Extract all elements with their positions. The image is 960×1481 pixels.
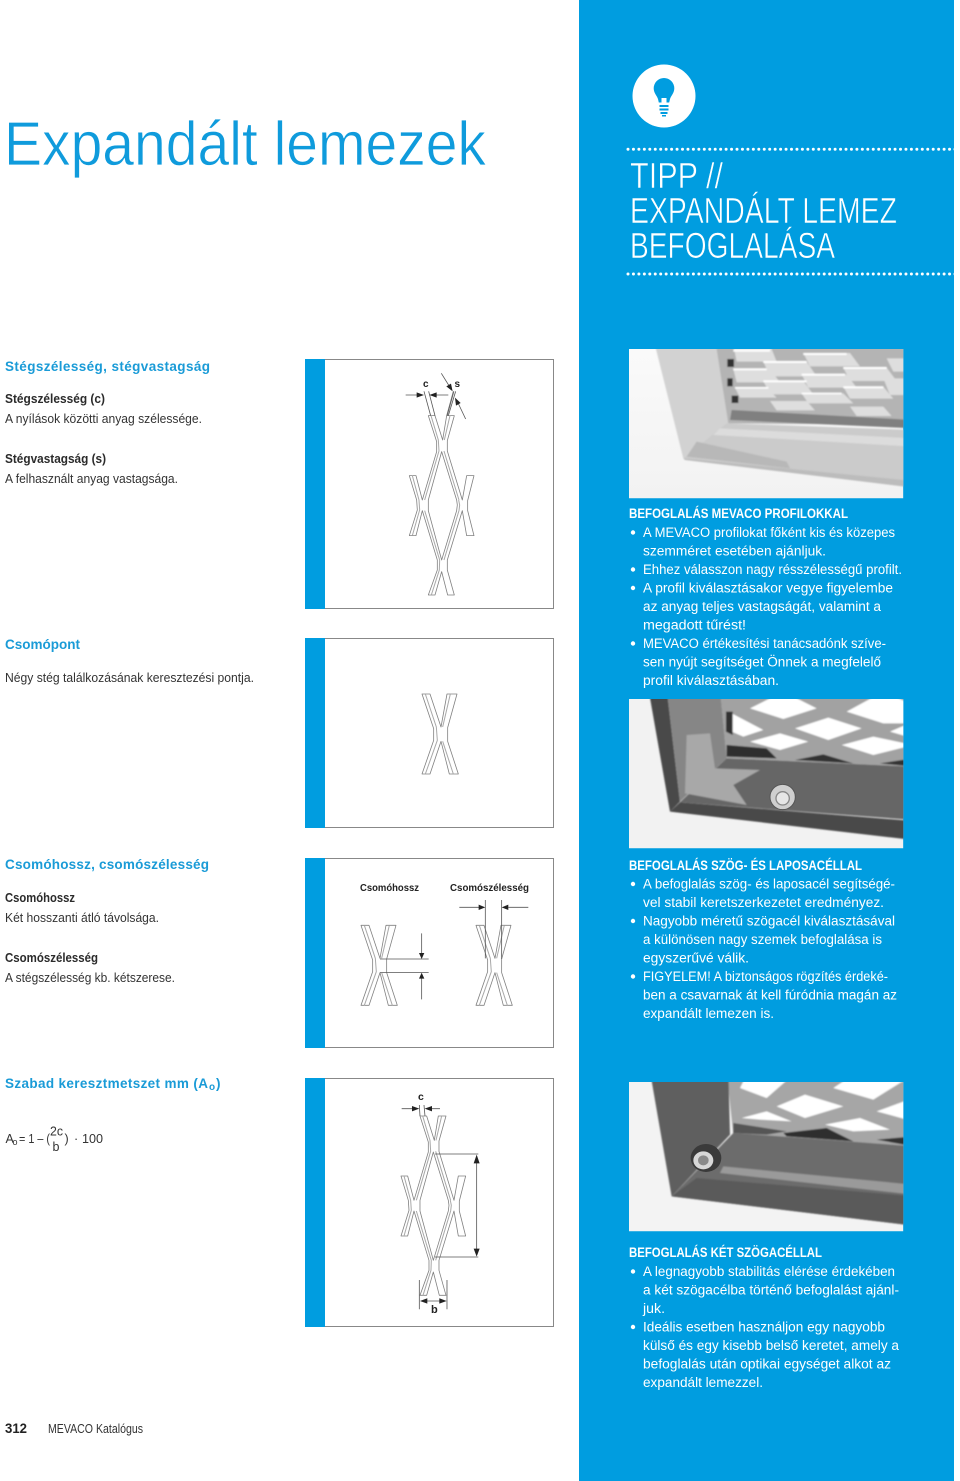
text block: mounting with two angle steels: befoglalás után optikai egységet alkot az: [643, 1356, 891, 1372]
panel: strand diagram: [305, 359, 554, 609]
chart: expanded mesh with c and s: [406, 373, 474, 595]
text block: strand width and thickness: [5, 359, 210, 486]
text block: mounting with mevaco profiles: A MEVACO profilokat főként kis és közepes: [643, 525, 895, 540]
text block: mounting with angle and flat steel: egyszerűvé válik.: [643, 950, 749, 966]
label s: s: [454, 379, 460, 390]
label c: c: [418, 1091, 424, 1103]
text block: free cross-section heading: o: [209, 1082, 215, 1093]
text block: mounting with angle and flat steel: Nagyobb méretű szögacél kiválasztásával: [643, 914, 895, 928]
label b: b: [431, 1304, 438, 1316]
text block: mounting with mevaco profiles: sen nyújt segítséget Önnek a megfelelő: [643, 654, 881, 670]
text block: mounting with two angle steels: külső és egy kisebb belső keretet, amely a: [643, 1338, 899, 1353]
text block: mounting with two angle steels: a két szögacélba történő befoglalást ajánl-: [643, 1282, 899, 1298]
text block: mounting with angle and flat steel: [629, 858, 897, 1021]
label c: c: [423, 379, 429, 390]
chart: node dimension drawings: [361, 900, 528, 1005]
text block: mounting with angle and flat steel: ben a csavarnak át kell fúródnia magán az: [643, 988, 897, 1002]
photo: angle and flat steel frame: [629, 688, 913, 848]
text block: node length and width: Csomóhossz: [5, 891, 75, 905]
text block: mounting with angle and flat steel: vel stabil keretszerkezetet eredményez.: [643, 895, 884, 910]
text block: node length and width: Csomószélesség: [5, 951, 98, 965]
text block: mounting with two angle steels: Ideális esetben használjon egy nagyobb: [643, 1320, 885, 1334]
formula: 100: [82, 1132, 103, 1146]
text block: mounting with angle and flat steel: A befoglalás szög- és laposacél segítségé-: [643, 876, 895, 892]
text block: strand width and thickness: Stégvastagság (s): [5, 452, 106, 466]
chart: mesh with b and c dimensions: [401, 1105, 480, 1309]
text block: mounting with mevaco profiles: az anyag teljes vastagságát, valamint a: [643, 599, 881, 614]
text block: mounting with angle and flat steel: FIGYELEM! A biztonságos rögzítés érdeké-: [643, 969, 888, 984]
formula: ·: [74, 1132, 78, 1146]
sidebar heading: TIPP //: [630, 155, 723, 196]
text block: node length and width: [5, 857, 209, 985]
text block: strand width and thickness: Stégszélesség, stégvastagság: [5, 359, 210, 374]
icon: mesh node: [422, 694, 458, 774]
text block: mounting with two angle steels: BEFOGLALÁS KÉT SZÖGACÉLLAL: [629, 1245, 822, 1260]
text block: node: Csomópont: [5, 637, 80, 652]
text block: strand width and thickness: A nyílások közötti anyag szélessége.: [5, 412, 202, 426]
sidebar heading: [630, 155, 897, 266]
panel: node diagram: [305, 638, 554, 828]
footer: page number and catalogue: [5, 1420, 143, 1436]
text block: mounting with two angle steels: A legnagyobb stabilitás elérése érdekében: [643, 1264, 895, 1279]
formula: A: [6, 1132, 14, 1146]
text block: node: [5, 637, 254, 685]
text block: mounting with mevaco profiles: A profil kiválasztásakor vegye figyelembe: [643, 580, 893, 596]
text block: mounting with mevaco profiles: megadott tűrést!: [643, 618, 746, 632]
icon: bolt: [770, 784, 795, 810]
text block: mounting with two angle steels: [629, 1245, 899, 1390]
formula: [6, 1124, 103, 1154]
text block: mounting with mevaco profiles: profil kiválasztásában.: [643, 673, 779, 688]
dotted rule bottom: [628, 272, 960, 276]
panel: free cross-section diagram: [305, 1078, 554, 1327]
text block: strand width and thickness: A felhasznált anyag vastagsága.: [5, 472, 178, 486]
photo: mevaco profile frame: [629, 338, 913, 498]
formula: b: [52, 1140, 60, 1154]
text block: node length and width: Csomóhossz, csomószélesség: [5, 857, 209, 872]
text block: mounting with mevaco profiles: szemméret esetében ajánljuk.: [643, 544, 826, 558]
label: node width: Csomószélesség: [450, 882, 529, 894]
text block: node length and width: Két hosszanti átló távolsága.: [5, 911, 159, 925]
label: node length: Csomóhossz: [360, 882, 419, 894]
sidebar heading: BEFOGLALÁSA: [630, 225, 835, 266]
text block: free cross-section heading: ): [216, 1076, 220, 1091]
text block: mounting with mevaco profiles: Ehhez válasszon nagy résszélességű profilt.: [643, 562, 902, 577]
formula: = 1 – (: [19, 1132, 51, 1146]
text block: free cross-section heading: Szabad keresztmetszet mm (A: [5, 1076, 208, 1091]
formula: o: [12, 1137, 18, 1147]
formula: 2c: [50, 1124, 63, 1138]
text block: mounting with angle and flat steel: BEFOGLALÁS SZÖG- ÉS LAPOSACÉLLAL: [629, 858, 862, 873]
text block: node: Négy stég találkozásának keresztezési pontja.: [5, 671, 254, 685]
photo: two angle steel frame: [629, 1071, 913, 1231]
text block: mounting with angle and flat steel: expandált lemezen is.: [643, 1006, 774, 1021]
panel: node length and width diagram: [305, 858, 554, 1048]
panel: blue sidebar: [579, 0, 954, 1481]
text block: mounting with two angle steels: juk.: [642, 1301, 665, 1316]
sidebar heading: EXPANDÁLT LEMEZ: [630, 190, 897, 231]
text block: mounting with angle and flat steel: a különösen nagy szemek befoglalása is: [643, 932, 882, 947]
icon: light bulb: [632, 64, 696, 128]
text block: mounting with mevaco profiles: MEVACO értékesítési tanácsadónk szíve-: [643, 636, 886, 651]
footer: page number and catalogue: 312: [5, 1420, 27, 1436]
text block: mounting with mevaco profiles: BEFOGLALÁS MEVACO PROFILOKKAL: [629, 506, 848, 521]
dotted rule top: [628, 148, 960, 151]
formula: ): [64, 1132, 69, 1146]
text block: node length and width: A stégszélesség kb. kétszerese.: [5, 971, 175, 985]
text block: mounting with two angle steels: expandált lemezzel.: [643, 1375, 763, 1390]
text block: mounting with mevaco profiles: [629, 506, 902, 688]
icon: bolt: [691, 1144, 721, 1172]
text block: strand width and thickness: Stégszélesség (c): [5, 392, 105, 406]
title: Expandált lemezek: [4, 110, 487, 179]
footer: page number and catalogue: MEVACO Katalógus: [48, 1422, 143, 1436]
